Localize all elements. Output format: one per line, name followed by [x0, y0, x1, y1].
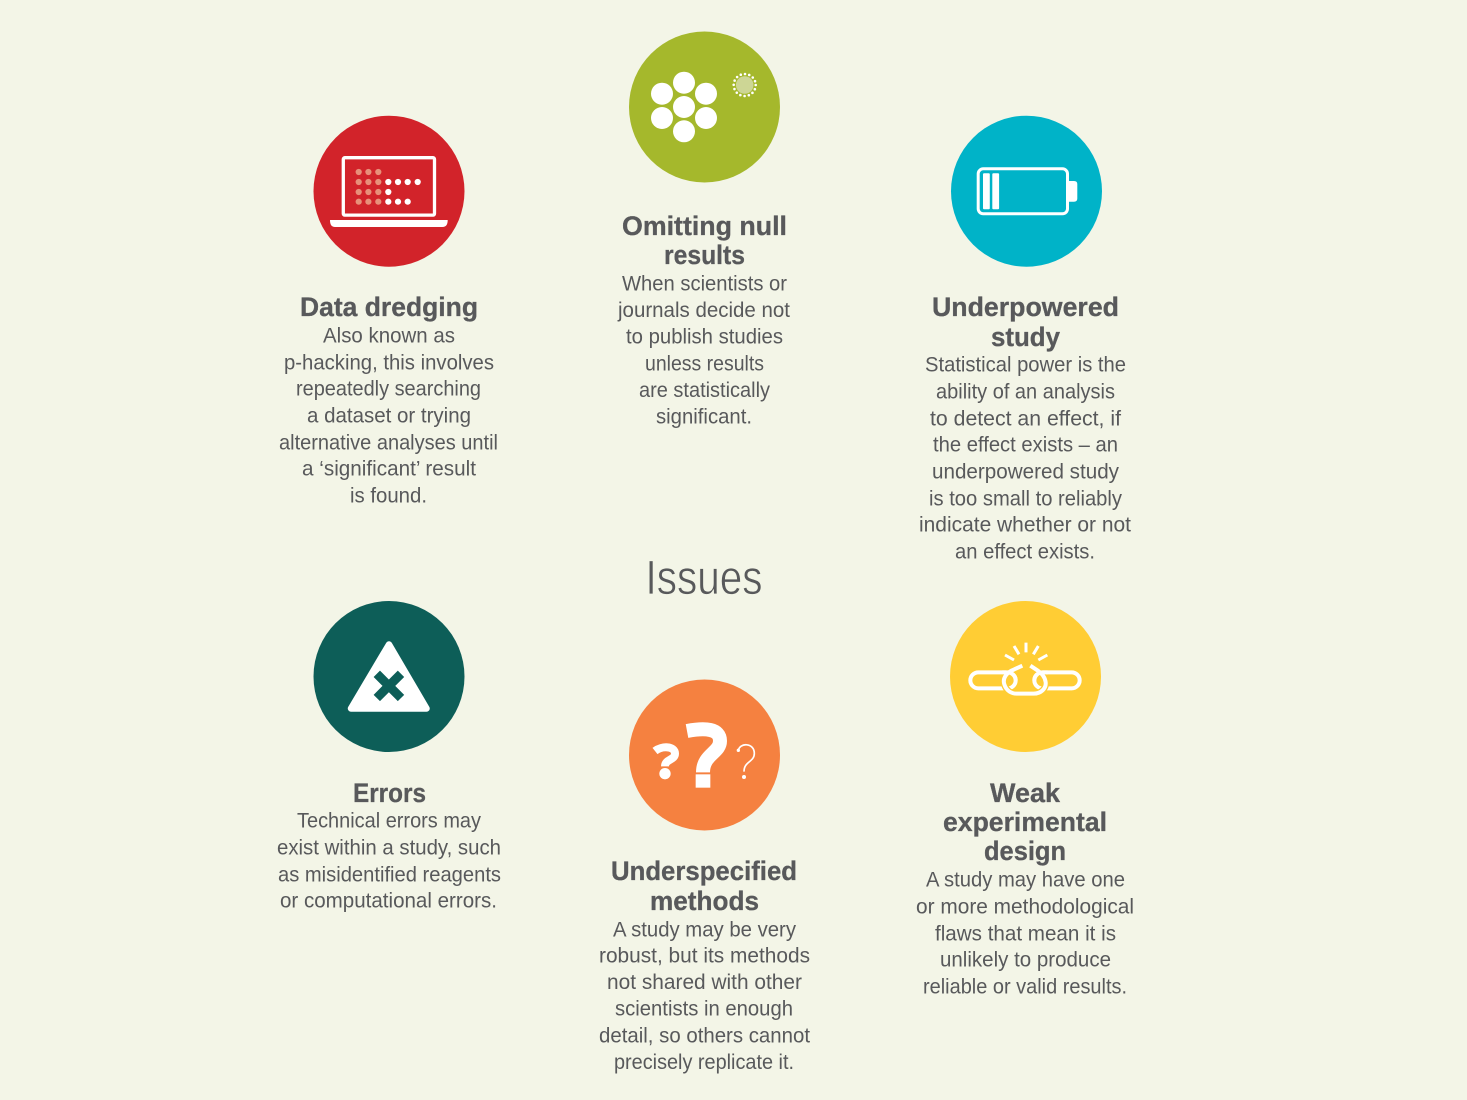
text block: omitting null results description — [617, 271, 790, 428]
heading: underspecified methods: Underspecified — [611, 856, 797, 886]
text block: weak experimental design description: reliable or valid results. — [923, 974, 1127, 998]
text block: errors description: exist within a study, such — [277, 835, 501, 859]
text block: omitting null results description: When scientists or — [622, 271, 787, 295]
icon: warning triangle with cross — [314, 601, 464, 752]
text block: data dredging description — [279, 323, 498, 507]
heading: omitting null results: results — [664, 240, 745, 270]
text block: underpowered study description: the effect exists – an — [933, 432, 1118, 456]
heading: weak experimental design — [943, 778, 1107, 866]
text block: underpowered study description — [919, 352, 1131, 563]
heading: underspecified methods — [611, 856, 797, 916]
text block: data dredging description: a dataset or trying — [307, 403, 471, 427]
text block: omitting null results description: significant. — [656, 404, 752, 428]
icon: broken chain — [950, 601, 1101, 752]
heading: weak experimental design: Weak — [990, 778, 1060, 808]
heading: weak experimental design: experimental — [943, 807, 1107, 837]
text block: weak experimental design description: or more methodological — [916, 894, 1134, 918]
text block: data dredging description: a ‘significant’ result — [302, 456, 476, 480]
panel: data dredging — [279, 116, 498, 507]
icon: three question marks — [629, 680, 780, 830]
text block: underpowered study description: ability of an analysis — [936, 379, 1115, 403]
text block: underspecified methods description: scientists in enough — [615, 996, 793, 1020]
text block: underpowered study description: an effect exists. — [955, 539, 1095, 563]
heading: omitting null results — [622, 211, 787, 270]
text block: errors description: or computational errors. — [280, 888, 497, 912]
text block: errors description: as misidentified reagents — [278, 862, 501, 886]
text block: omitting null results description: to publish studies — [626, 324, 783, 348]
text block: data dredging description: Also known as — [323, 323, 455, 347]
panel: weak experimental design — [916, 601, 1134, 998]
text block: underspecified methods description: robust, but its methods — [599, 943, 810, 967]
text block: underpowered study description: is too small to reliably — [929, 486, 1122, 510]
text block: omitting null results description: unless results — [645, 351, 764, 375]
icon: low battery — [951, 116, 1102, 267]
text block: errors description: Technical errors may — [297, 808, 481, 832]
heading: underspecified methods: methods — [650, 886, 759, 916]
icon: laptop with dots — [314, 116, 464, 267]
text block: errors description — [277, 808, 501, 912]
panel: errors — [277, 601, 501, 912]
heading: underpowered study: study — [991, 322, 1060, 352]
panel: underspecified methods — [599, 680, 810, 1074]
title: issues: Issues — [646, 552, 762, 605]
text block: omitting null results description: are statistically — [639, 378, 770, 402]
text block: underspecified methods description: not shared with other — [607, 970, 802, 994]
text block: underpowered study description: Statistical power is the — [925, 352, 1126, 376]
text block: data dredging description: is found. — [350, 483, 427, 507]
heading: underpowered study: Underpowered — [932, 292, 1119, 322]
heading: omitting null results: Omitting null — [622, 211, 787, 241]
text block: weak experimental design description: A study may have one — [926, 867, 1125, 891]
heading: weak experimental design: design — [984, 836, 1066, 866]
text block: data dredging description: repeatedly searching — [296, 376, 481, 400]
text block: underpowered study description: underpowered study — [932, 459, 1119, 483]
text block: underspecified methods description: precisely replicate it. — [614, 1050, 794, 1074]
panel: underpowered study — [919, 116, 1131, 563]
icon: cluster of dots with faded dot — [629, 32, 780, 182]
text block: underspecified methods description: A study may be very — [613, 917, 796, 941]
heading: data dredging: Data dredging — [300, 292, 478, 322]
heading: errors: Errors — [353, 778, 426, 808]
text block: weak experimental design description: unlikely to produce — [940, 947, 1111, 971]
text block: data dredging description: p-hacking, this involves — [284, 350, 494, 374]
text block: weak experimental design description — [916, 867, 1134, 998]
heading: underpowered study — [932, 292, 1119, 352]
text block: omitting null results description: journals decide not — [617, 298, 790, 322]
panel: omitting null results — [617, 32, 790, 428]
text block: underspecified methods description: detail, so others cannot — [599, 1023, 810, 1047]
text block: data dredging description: alternative analyses until — [279, 430, 498, 454]
text block: weak experimental design description: flaws that mean it is — [935, 921, 1116, 945]
text block: underpowered study description: indicate whether or not — [919, 512, 1131, 536]
text block: underspecified methods description — [599, 917, 810, 1074]
text block: underpowered study description: to detect an effect, if — [930, 406, 1121, 430]
